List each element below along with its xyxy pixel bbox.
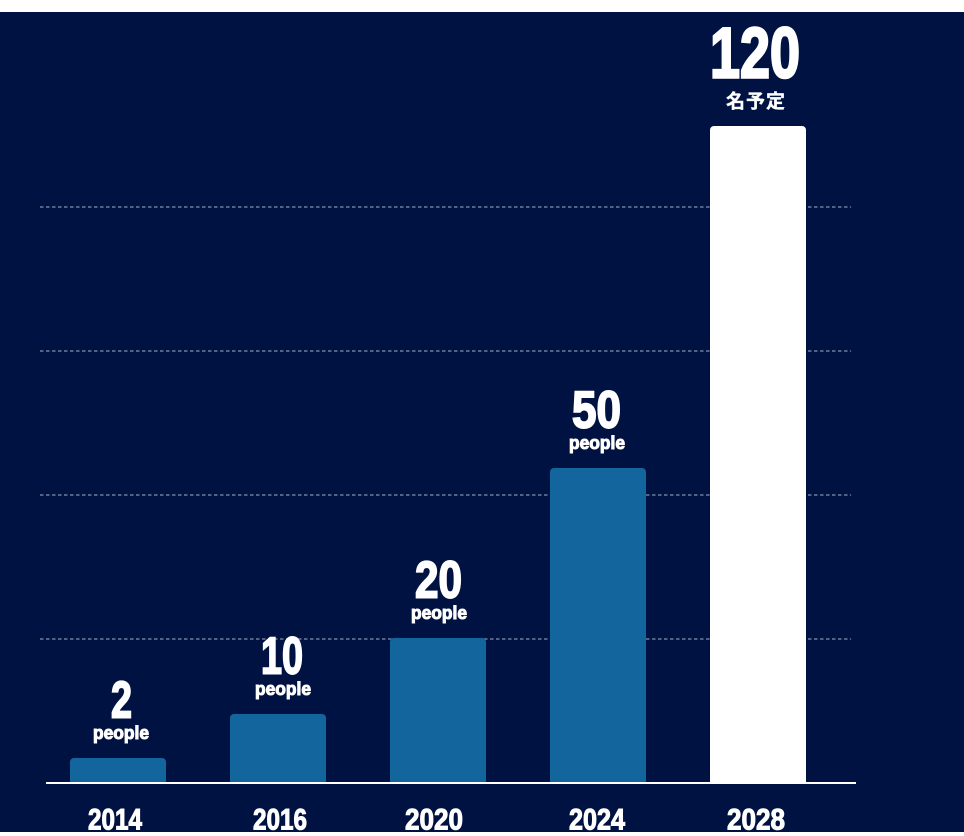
year labels [88, 804, 785, 836]
label 2028: 120 [710, 14, 800, 94]
label 2028: 名予定 [726, 90, 786, 112]
label 2014 [93, 672, 149, 743]
label 2020: 20 [415, 552, 462, 610]
value labels [93, 14, 800, 743]
axis line [46, 782, 856, 784]
label 2016: 10 [261, 628, 303, 686]
bars [70, 126, 806, 782]
year 2016: 2016 [253, 804, 307, 836]
label 2016 [255, 628, 311, 699]
year 2020: 2020 [405, 804, 463, 836]
label 2028 [710, 14, 800, 112]
label 2020: people [411, 602, 467, 623]
bar 2028 [710, 126, 806, 782]
bar 2014 [70, 758, 166, 782]
bar 2020 [390, 638, 486, 782]
year 2024: 2024 [569, 804, 625, 836]
bar 2016 [230, 714, 326, 782]
year 2014: 2014 [88, 804, 142, 836]
bar 2024 [550, 468, 646, 782]
label 2016: people [255, 678, 311, 699]
year 2028: 2028 [727, 804, 785, 836]
label 2014: people [93, 722, 149, 743]
label 2024: 50 [572, 382, 621, 440]
label 2024: people [569, 432, 625, 453]
label 2014: 2 [111, 672, 132, 730]
label 2020 [411, 552, 467, 623]
